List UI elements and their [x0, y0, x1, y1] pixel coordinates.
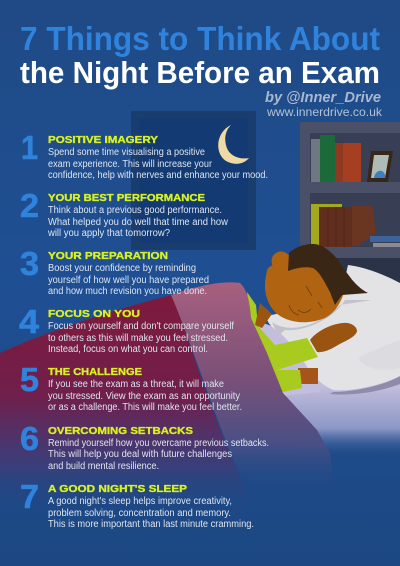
byline: www.innerdrive.co.uk [266, 105, 383, 119]
item 1: confidence, help with nerves and enhance your mood. [48, 170, 268, 181]
item 7: A GOOD NIGHT'S SLEEP [48, 483, 187, 495]
title: 7 Things to Think About [20, 20, 380, 57]
item 4: FOCUS ON YOU [48, 308, 140, 320]
hand on pillow [310, 323, 357, 352]
bookshelf [300, 122, 400, 288]
item 7 [20, 478, 254, 530]
item 7: problem solving, concentration and memory. [48, 508, 231, 519]
item 1: 1 [21, 129, 38, 166]
item 3: yourself of how well you have prepared [48, 275, 209, 286]
green pyjamas [247, 292, 318, 392]
item 1: Spend some time visualising a positive [48, 147, 205, 158]
item 4: Focus on yourself and don't compare yourself [48, 321, 234, 332]
item 5: THE CHALLENGE [48, 366, 142, 378]
picture frame [367, 151, 393, 182]
byline: by @Inner_Drive [265, 90, 381, 106]
item 2: will you apply that tomorrow? [47, 228, 170, 239]
closed eyes and mouth [289, 286, 322, 315]
bed under the sleeve [255, 320, 320, 396]
item 5: If you see the exam as a threat, it will make [48, 379, 224, 390]
pillow crease [358, 340, 400, 370]
item 5: you stressed. View the exam as an opportunity [48, 391, 240, 402]
item 1: POSITIVE IMAGERY [48, 134, 158, 146]
item 2: 2 [20, 187, 39, 224]
pillow shading [272, 300, 372, 336]
item 4 [19, 303, 234, 355]
title [20, 20, 380, 90]
item 1: exam experience. This will increase your [48, 159, 213, 170]
hair [288, 244, 368, 305]
item 5 [20, 361, 242, 413]
neck [255, 303, 272, 328]
item 5: 5 [20, 361, 39, 398]
item 5: or as a challenge. This will make you feel better. [48, 402, 242, 413]
item 1 [21, 129, 268, 181]
title: the Night Before an Exam [20, 55, 380, 90]
books top shelf [311, 135, 361, 182]
item 2: YOUR BEST PERFORMANCE [48, 192, 205, 204]
item 2 [20, 187, 229, 239]
item 3: YOUR PREPARATION [48, 250, 168, 262]
item 7: 7 [20, 478, 39, 515]
item 6: 6 [20, 420, 39, 457]
ear [272, 252, 290, 270]
item 2: What helped you do well that time and how [48, 217, 229, 228]
item 3 [20, 245, 209, 297]
window with moon [131, 111, 256, 250]
sleeping student [247, 244, 368, 392]
item 7: This is more important than last minute cramming. [48, 519, 254, 530]
icon: crescent moon [218, 125, 249, 164]
item 6: OVERCOMING SETBACKS [48, 425, 193, 437]
item 3: Boost your confidence by reminding [48, 263, 196, 274]
pillow [267, 265, 400, 390]
item 4: 4 [19, 303, 40, 340]
books lower shelf [311, 204, 400, 247]
item 6: Remind yourself how you overcame previous setbacks. [48, 438, 269, 449]
item 6: and build mental resilience. [48, 461, 159, 472]
item 6 [20, 420, 269, 472]
item 7: A good night's sleep helps improve creativity, [48, 496, 232, 507]
item 4: Instead, focus on what you can control. [48, 344, 208, 355]
item 4: to others as this will make you feel stressed. [48, 333, 228, 344]
pillow shadow [330, 376, 400, 395]
item 6: This will help you deal with future challenges [48, 449, 232, 460]
head [265, 255, 345, 322]
item 3: and how much revision you have done. [48, 286, 207, 297]
bed [255, 330, 400, 458]
item 3: 3 [20, 245, 39, 282]
lower arm [298, 368, 318, 384]
red blanket [0, 295, 258, 515]
mauve blanket fold [171, 282, 335, 495]
byline [265, 90, 383, 119]
item 2: Think about a previous good performance. [48, 205, 222, 216]
